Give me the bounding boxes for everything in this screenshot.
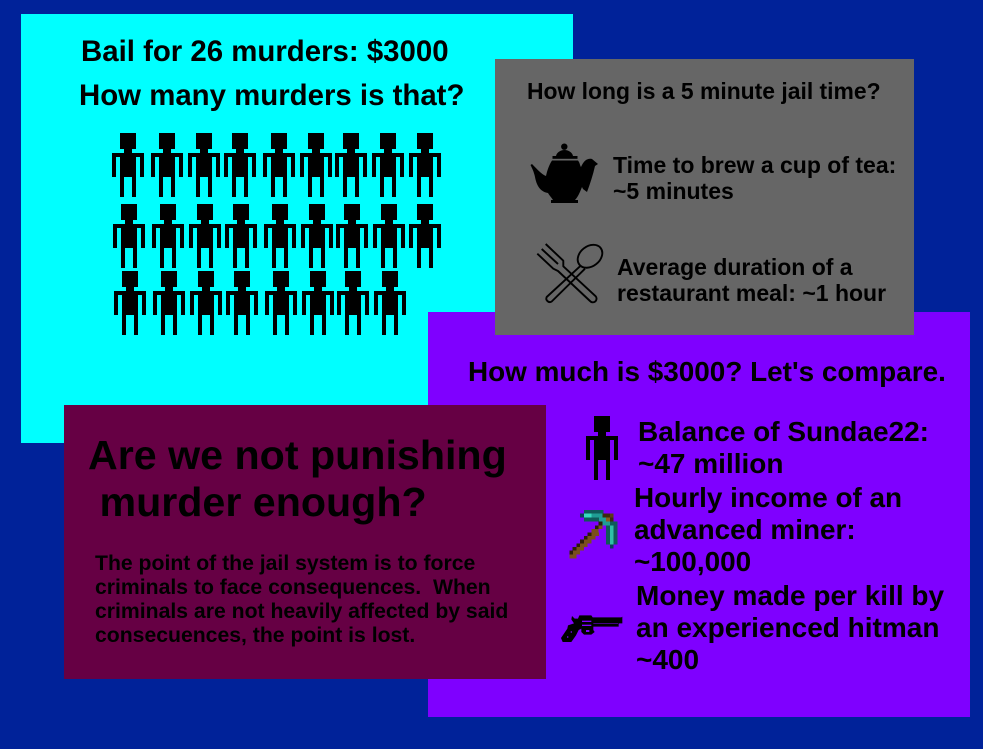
text: jail system explanation: The point of the jail system is to force criminals to face consequences. When criminals are not heavily affected by said consecuences, the point is lost. — [95, 552, 508, 647]
icon: pickaxe — [570, 510, 618, 558]
heading: bail amount: Bail for 26 murders: $3000 — [81, 35, 449, 68]
panel: punishment — [64, 405, 546, 679]
icon: revolver — [561, 615, 622, 642]
text: miner income: Hourly income of an advanced miner: ~100,000 — [634, 482, 902, 577]
text: restaurant meal: Average duration of a restaurant meal: ~1 hour — [617, 254, 886, 306]
panel: jail time — [495, 59, 914, 335]
text: hitman pay: Money made per kill by an experienced hitman ~400 — [636, 580, 944, 675]
icon grid: 26 figures — [112, 133, 441, 335]
icon: fork and spoon — [536, 243, 604, 304]
icon: teapot — [530, 144, 598, 203]
heading: how much is 3000: How much is $3000? Let's compare. — [468, 356, 946, 387]
text: sundae balance: Balance of Sundae22: ~47 million — [638, 416, 929, 479]
panel: bail — [21, 14, 573, 443]
icon: figure — [586, 416, 618, 480]
heading: jail time: How long is a 5 minute jail time? — [527, 78, 881, 104]
panel: compare money — [428, 312, 970, 717]
heading: how many murders: How many murders is that? — [79, 79, 464, 112]
text: tea time: Time to brew a cup of tea: ~5 minutes — [613, 152, 896, 204]
heading: punishing murder: Are we not punishing murder enough? — [88, 432, 507, 525]
